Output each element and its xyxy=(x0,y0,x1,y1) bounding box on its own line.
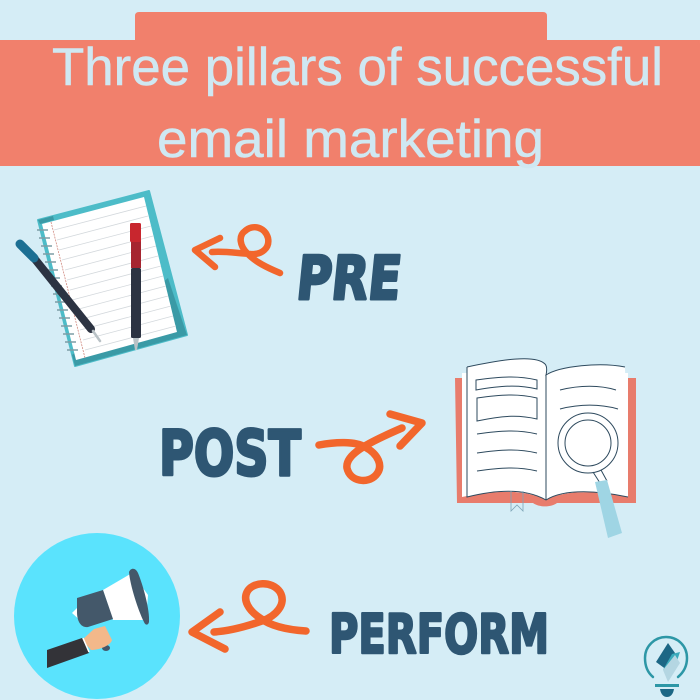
icon: open book with magnifier xyxy=(455,359,636,538)
label: PERFORM: PERFORM xyxy=(329,603,549,666)
magnifier handle xyxy=(595,480,622,538)
arrow: pre xyxy=(195,227,280,273)
red pen xyxy=(130,223,141,350)
title banner xyxy=(0,12,700,169)
arrow: perform xyxy=(192,584,306,649)
arrow: post xyxy=(319,414,422,480)
icon: notebook with pens xyxy=(20,191,187,366)
notebook spiral xyxy=(37,230,78,350)
bookmark xyxy=(511,491,523,511)
title xyxy=(52,38,663,169)
label: PRE: PRE xyxy=(294,244,405,314)
title: Three pillars of successful xyxy=(52,38,663,97)
label: POST: POST xyxy=(159,417,301,490)
blue pen xyxy=(20,244,100,341)
title: email marketing xyxy=(157,110,544,169)
logo: lightbulb xyxy=(645,637,687,697)
icon: megaphone in circle xyxy=(14,533,180,699)
